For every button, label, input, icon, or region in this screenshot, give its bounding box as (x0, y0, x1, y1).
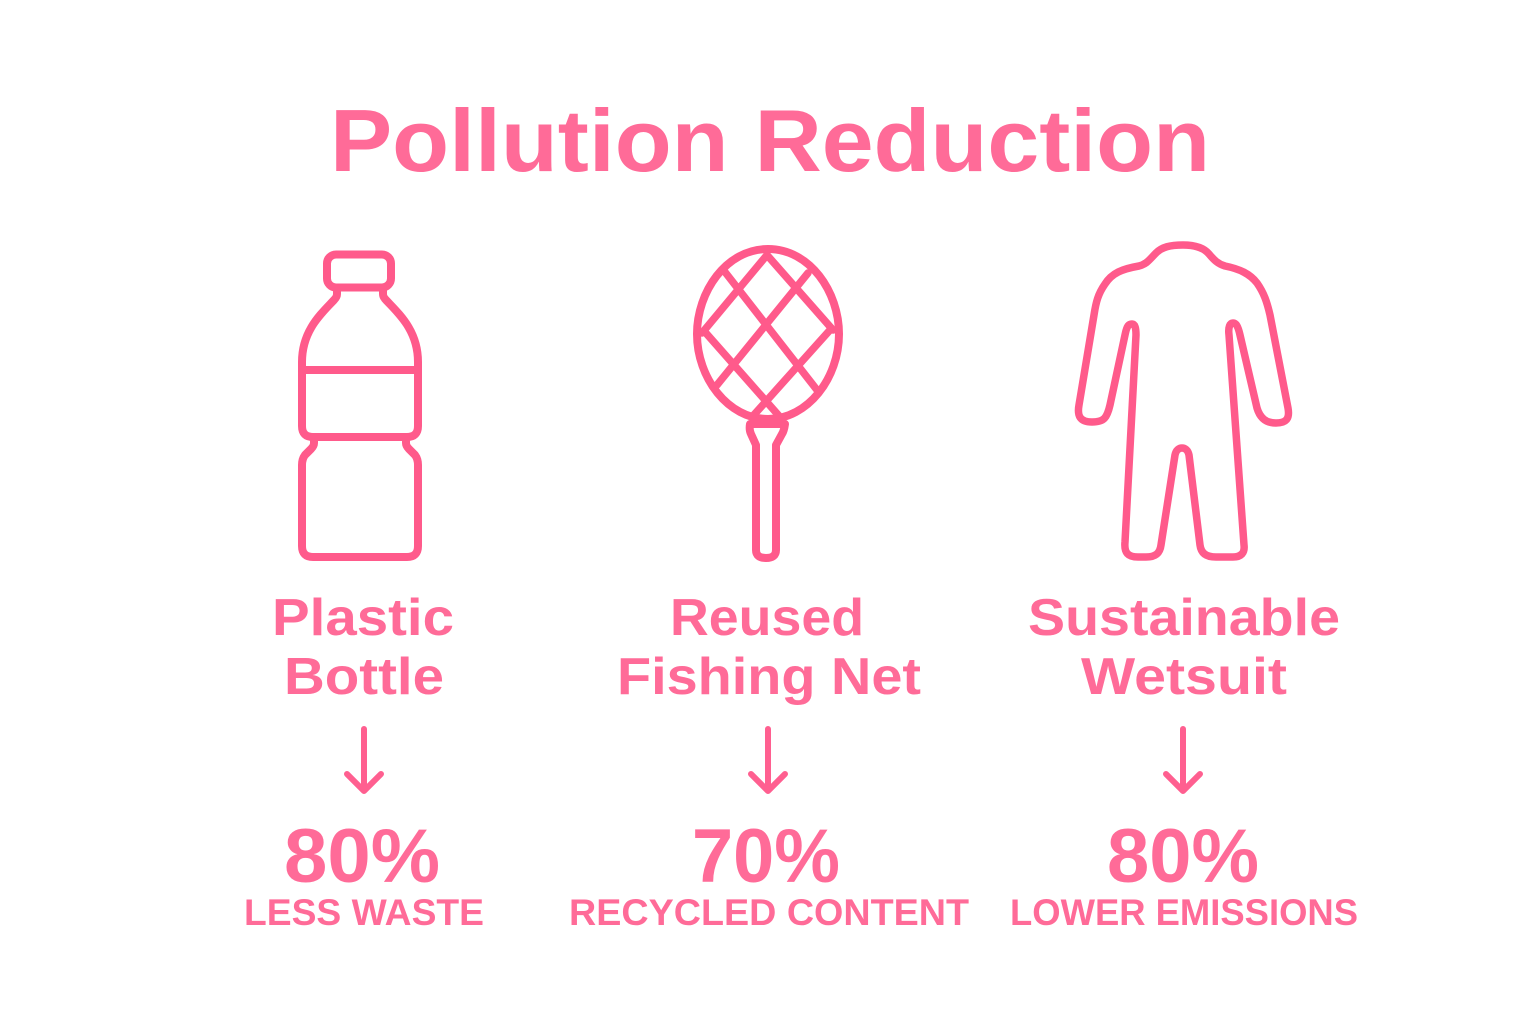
arrow: fishing net (751, 729, 785, 791)
stat: 80% lower emissions: 80% (1107, 814, 1259, 899)
label: plastic bottle: Plastic (272, 589, 454, 647)
label: reused fishing net: Fishing Net (617, 648, 921, 706)
label: reused fishing net: Reused (670, 589, 864, 647)
icon: plastic bottle (302, 254, 418, 557)
stat: 80% less waste: LESS WASTE (244, 892, 484, 933)
title: Pollution Reduction (330, 91, 1210, 190)
stat: 70% recycled content: 70% (692, 814, 840, 899)
stat: 80% less waste (244, 814, 484, 933)
label: plastic bottle: Bottle (284, 648, 444, 706)
icon: fishing net (697, 249, 839, 558)
arrow: plastic bottle (347, 729, 381, 791)
icon: wetsuit (1078, 245, 1288, 557)
label: sustainable wetsuit: Wetsuit (1081, 648, 1287, 706)
arrow: wetsuit (1166, 729, 1200, 791)
label: plastic bottle (272, 589, 454, 706)
stat: 80% less waste: 80% (284, 814, 440, 899)
stat: 80% lower emissions (1010, 814, 1358, 933)
stat: 70% recycled content (569, 814, 969, 933)
stat: 80% lower emissions: LOWER EMISSIONS (1010, 892, 1358, 933)
stat: 70% recycled content: RECYCLED CONTENT (569, 892, 969, 933)
label: reused fishing net (617, 589, 921, 706)
label: sustainable wetsuit (1028, 589, 1340, 706)
label: sustainable wetsuit: Sustainable (1028, 589, 1340, 647)
